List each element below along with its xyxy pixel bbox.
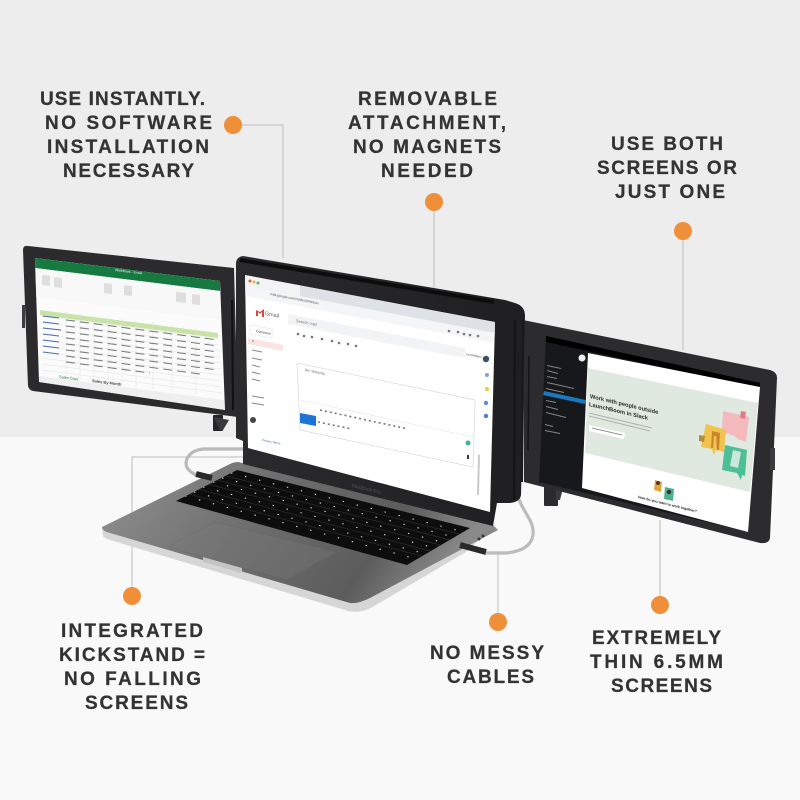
- right screen dark: [539, 336, 760, 532]
- heading: removable attachment: NEEDED: [381, 161, 473, 182]
- heading: no messy cables: CABLES: [447, 667, 534, 688]
- heading: use both screens: USE BOTH: [611, 134, 723, 155]
- compose box: [297, 363, 475, 467]
- heading: removable attachment: NO MAGNETS: [353, 137, 501, 158]
- heading: use instantly: USE INSTANTLY.: [40, 89, 205, 110]
- excel sheet tabs: Sales By Month: [92, 378, 122, 387]
- heading: kickstand: KICKSTAND =: [59, 645, 205, 666]
- gmail logo: [256, 309, 279, 318]
- heading: removable attachment: ATTACHMENT,: [348, 113, 506, 134]
- excel ribbon: [35, 268, 220, 305]
- heading: thin screens: [590, 628, 723, 697]
- slack sidebar items: [545, 365, 574, 434]
- excel table: [40, 310, 222, 394]
- side panel icons: [484, 373, 489, 418]
- heading: use both screens: SCREENS OR: [597, 158, 737, 179]
- slack footer caption: How do you want to work together?: [638, 495, 697, 514]
- heading: no messy cables: [430, 643, 544, 688]
- sidebar links: Privacy Terms: [262, 438, 281, 446]
- MacBook label: MacBook Pro: [352, 483, 381, 496]
- left monitor: [22, 246, 238, 431]
- leader line: both screens: [682, 231, 684, 350]
- right cable: [460, 492, 533, 553]
- leader line: kickstand: [132, 457, 243, 596]
- heading: use instantly: NECESSARY: [63, 161, 194, 182]
- heading: use instantly: [40, 89, 212, 182]
- slack subtext and button: [589, 413, 652, 439]
- excel title bar: [35, 258, 220, 291]
- right monitor: [523, 320, 777, 543]
- slack headline: LaunchBoom in Slack: [589, 402, 649, 422]
- slack green banner: [585, 368, 758, 492]
- excel sheet tabs: [39, 374, 225, 410]
- scrollbar: [477, 455, 480, 495]
- heading: thin screens: SCREENS: [611, 676, 712, 697]
- sidebar items: [252, 341, 264, 405]
- laptop base: [102, 462, 498, 612]
- compose button: [250, 325, 272, 338]
- account chip: LunchBoom: [466, 352, 482, 359]
- slack round logo: [578, 354, 586, 362]
- heading: use instantly: INSTALLATION: [47, 137, 209, 158]
- heading: use instantly: NO SOFTWARE: [45, 113, 212, 134]
- heading: use both screens: [597, 134, 737, 203]
- inbox highlight: [248, 338, 283, 351]
- heading: use both screens: JUST ONE: [615, 182, 725, 203]
- laptop ports: [478, 534, 484, 540]
- icon row: [297, 330, 479, 347]
- leader line: use instantly: [233, 125, 283, 258]
- excel sheet tabs: Sales Data: [59, 374, 79, 382]
- heading: no messy cables: NO MESSY: [430, 643, 544, 664]
- heading: thin screens: EXTREMELY: [592, 628, 721, 649]
- browser chrome: [245, 275, 495, 343]
- excel title bar: Workbook - Excel: [115, 268, 142, 275]
- leader line: thin screens: [659, 520, 661, 605]
- heading: kickstand: NO FALLING: [64, 669, 201, 690]
- gmail search bar: Search mail: [296, 318, 317, 327]
- slack headline: Work with people outside: [590, 394, 659, 416]
- leader line: removable attachment: [433, 202, 435, 290]
- browser chrome: mail.google.com/mail/u/0/#inbox: [270, 292, 319, 306]
- compose button: Compose: [256, 329, 271, 336]
- gmail search bar: [288, 314, 465, 358]
- orange marker dots: [123, 116, 692, 631]
- left cable: [186, 449, 243, 478]
- profile thumbnail: [250, 417, 256, 423]
- account chip: [466, 352, 489, 362]
- gmail logo: Gmail: [265, 311, 279, 320]
- slack selected item: [543, 391, 586, 404]
- center screen: [245, 275, 495, 512]
- heading: kickstand: SCREENS: [85, 693, 188, 714]
- heading: removable attachment: [348, 89, 506, 182]
- center panel frame and laptop lid: [232, 256, 529, 526]
- leader line: cables: [497, 553, 499, 622]
- slack white page: [582, 353, 760, 532]
- slack portraits: [654, 480, 674, 501]
- heading: removable attachment: REMOVABLE: [358, 89, 497, 110]
- heading: thin screens: THIN 6.5MM: [590, 652, 723, 673]
- heading: kickstand: [59, 621, 205, 714]
- compose box: Re: Shipping: [305, 368, 325, 376]
- send button: [300, 413, 316, 426]
- heading: kickstand: INTEGRATED: [61, 621, 203, 642]
- slack illustrations: [699, 411, 749, 480]
- slack top bar: [546, 336, 760, 388]
- laptop keyboard: [176, 470, 470, 565]
